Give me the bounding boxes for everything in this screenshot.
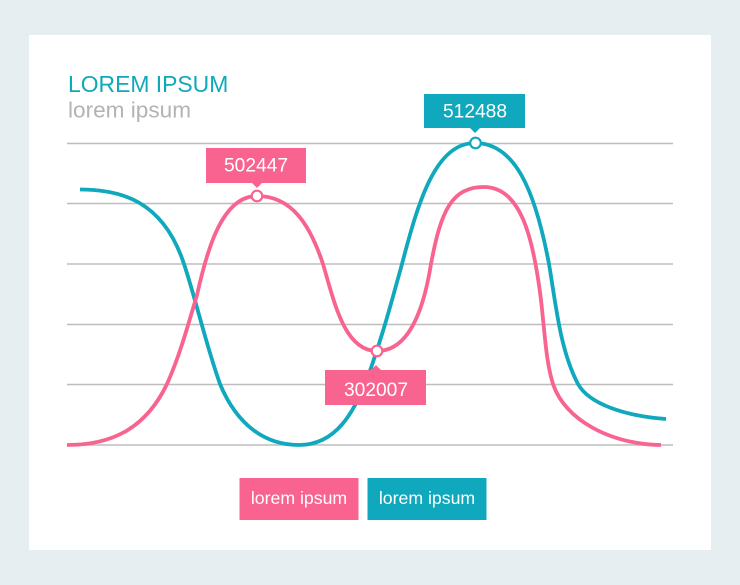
legend: teal xyxy=(368,478,486,520)
legend: teal: lorem ipsum xyxy=(379,488,475,508)
subtitle: lorem ipsum xyxy=(68,98,191,122)
callout: 302007: 302007 xyxy=(344,380,408,401)
marker: teal peak xyxy=(470,138,481,148)
legend: pink xyxy=(240,478,358,520)
marker: pink minimum xyxy=(372,346,382,356)
callout: 502447 xyxy=(206,148,306,188)
callout: 302007 xyxy=(325,365,426,405)
callout: 512488 xyxy=(424,94,525,133)
teal line series xyxy=(80,143,666,445)
callout: 512488: 512488 xyxy=(443,102,507,122)
legend: pink: lorem ipsum xyxy=(251,488,347,508)
title: LOREM IPSUM xyxy=(68,71,228,97)
pink line series xyxy=(67,187,661,445)
marker: pink peak xyxy=(252,191,262,201)
grid lines xyxy=(67,144,673,445)
callout: 502447: 502447 xyxy=(224,156,288,176)
